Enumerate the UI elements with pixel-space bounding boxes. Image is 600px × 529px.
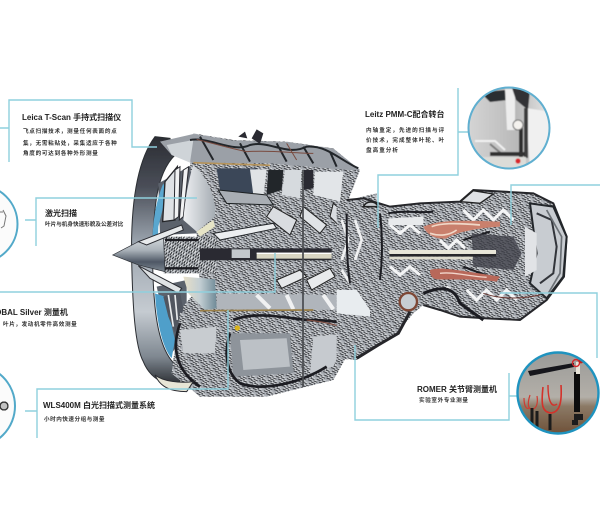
text block: WLS400M <box>43 400 155 423</box>
body: ROMER: 实验室外专业测量 <box>419 396 469 404</box>
body: WLS400M: 小时内快速分组与测量 <box>44 415 105 423</box>
body: GLOBAL Silver: 叶片，发动机零件高效测量 <box>3 320 77 328</box>
compressor upper <box>267 207 297 235</box>
nacelle inner blue <box>152 183 167 253</box>
heading: laser scan: 激光扫描 <box>45 208 77 218</box>
body: Leitz PMM-C: 价技术，完成整体叶轮、叶 <box>366 136 445 144</box>
text block: Leica T-Scan <box>22 112 121 157</box>
line: right top <box>511 185 600 225</box>
callout lines <box>0 88 600 438</box>
icon: laser scan photo circle <box>0 185 18 263</box>
line: WLS400M <box>25 310 228 438</box>
line: T-Scan <box>0 100 157 162</box>
lower casing <box>172 313 357 397</box>
rear outline <box>347 190 567 320</box>
body: Leitz PMM-C <box>366 126 445 154</box>
icon: Leitz PMM-C photo circle <box>468 87 552 172</box>
dark wires <box>347 212 490 283</box>
engine rear: turbine section <box>337 190 567 360</box>
fan backing <box>158 163 197 235</box>
body: Leica T-Scan: 飞点扫描技术，测量任何表面的点 <box>23 127 117 135</box>
line: laser scan <box>25 198 197 246</box>
line: ROMER <box>355 345 520 420</box>
tan strip <box>193 163 270 165</box>
body: Leitz PMM-C: 内轴重定，先进的扫描与评 <box>366 126 445 134</box>
body: Leica T-Scan <box>23 127 117 157</box>
main blade upper <box>183 165 215 232</box>
body: Leitz PMM-C: 盘高重分析 <box>366 146 399 154</box>
lower accessory pipes <box>400 293 417 310</box>
heading: Leica T-Scan: Leica T-Scan 手持式扫描仪 <box>22 112 121 122</box>
icon: ROMER arm photo circle <box>518 352 598 434</box>
arm <box>528 363 574 376</box>
centre shaft <box>389 250 496 254</box>
heading: Leitz PMM-C: Leitz PMM-C配合转台 <box>365 109 445 119</box>
red forks <box>542 385 561 413</box>
line: Leitz <box>378 88 468 228</box>
heading: ROMER: ROMER 关节臂测量机 <box>417 384 497 394</box>
text block: Leitz PMM-C <box>365 109 445 154</box>
red combustor upper <box>423 221 500 239</box>
nacelle ring <box>132 137 180 387</box>
engine front: fan section <box>113 129 377 397</box>
spinner cone <box>113 233 165 272</box>
upper stator vanes <box>217 168 257 193</box>
top knobs <box>238 129 263 144</box>
base texture <box>172 133 377 397</box>
centre section line <box>302 170 304 387</box>
body: Leica T-Scan: 角度的可达到各种外形测量 <box>23 149 99 157</box>
body: Leica T-Scan: 集，无需粘贴处，采集适应于各种 <box>23 139 117 147</box>
machine gantry <box>484 90 506 102</box>
engine illustration <box>113 129 567 397</box>
rear silhouette <box>337 190 567 360</box>
white chevrons <box>390 210 517 300</box>
text block: ROMER <box>417 384 497 404</box>
fan hub <box>163 237 217 273</box>
text block: laser scan <box>45 208 124 228</box>
front band highlights <box>388 217 423 225</box>
fan blades upper <box>163 167 177 222</box>
main shaft <box>200 248 332 260</box>
top casing <box>160 134 360 170</box>
line: right lower <box>500 293 597 358</box>
lower fan blade <box>183 277 217 310</box>
line: GLOBAL Silver <box>0 253 275 292</box>
rear top lump <box>461 191 493 203</box>
heading: WLS400M: WLS400M 白光扫描式测量系统 <box>43 400 155 410</box>
lower stator <box>277 270 307 288</box>
icon: WLS400M photo circle <box>0 365 15 447</box>
nacelle bottom lip <box>155 375 193 392</box>
body: laser scan: 叶片与机身快速形貌及公差对比 <box>45 220 124 228</box>
rear nozzle ring <box>530 203 567 298</box>
turbine dark core <box>472 233 522 270</box>
red combustor lower <box>430 269 500 282</box>
text block: GLOBAL Silver <box>0 307 77 328</box>
